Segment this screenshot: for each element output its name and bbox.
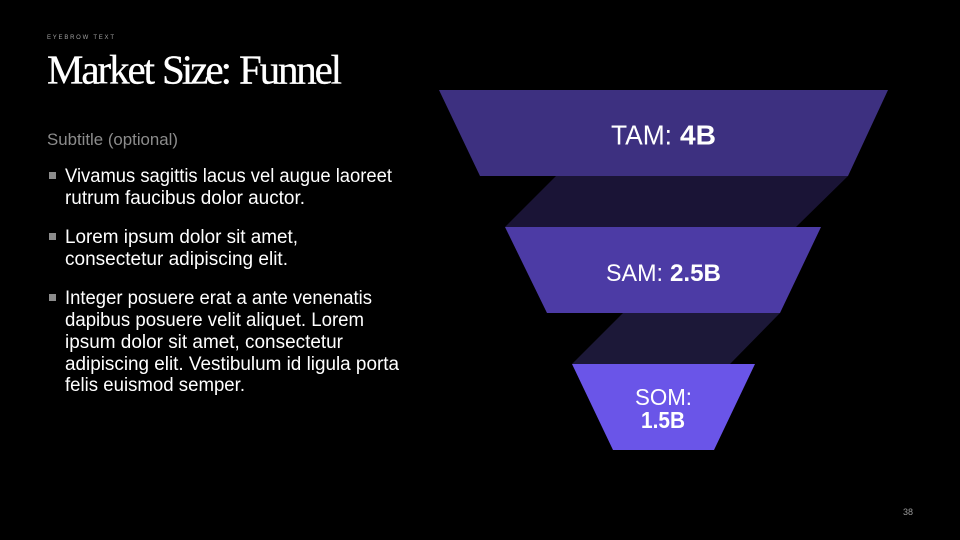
funnel tier: SAM [505, 227, 821, 313]
page number: 38 [903, 507, 913, 517]
bullet 3 [49, 288, 399, 396]
title: Size: [162, 46, 232, 92]
bullet 3: ipsum dolor sit amet, consectetur [65, 332, 344, 353]
title: Funnel [239, 46, 342, 92]
bullet 1 [49, 166, 393, 209]
bullet 3: dapibus posuere velit aliquet. Lorem [65, 310, 364, 331]
bullet 3: felis euismod semper. [65, 375, 245, 396]
connector: TAM to SAM [505, 176, 848, 227]
eyebrow text: EYEBROW TEXT [47, 35, 114, 41]
funnel chart [439, 90, 888, 450]
bullet 3: adipiscing elit. Vestibulum id ligula porta [65, 354, 399, 375]
funnel tier: SAM: 2.5B [670, 260, 721, 287]
funnel tier: SOM: SOM: [635, 384, 692, 410]
bullet 2 [49, 227, 298, 270]
funnel tier: TAM: 4B [680, 120, 716, 150]
title [47, 46, 342, 92]
funnel tier: SOM [572, 364, 755, 450]
funnel tier: SOM: 1.5B [641, 407, 685, 433]
bullet 3: Integer posuere erat a ante venenatis [65, 288, 372, 309]
funnel tier: TAM [439, 90, 888, 176]
bullet 2: Lorem ipsum dolor sit amet, [65, 227, 298, 248]
bullet 2: consectetur adipiscing elit. [65, 249, 288, 270]
title: Market [47, 46, 156, 92]
subtitle: Subtitle (optional) [47, 130, 178, 149]
connector: SAM to SOM [572, 313, 780, 364]
bullet list [49, 166, 399, 396]
funnel tier: SAM: SAM: [606, 260, 663, 287]
bullet 1: rutrum faucibus dolor auctor. [65, 188, 305, 209]
bullet 1: Vivamus sagittis lacus vel augue laoreet [65, 166, 393, 187]
funnel tier: TAM: TAM: [611, 120, 672, 150]
